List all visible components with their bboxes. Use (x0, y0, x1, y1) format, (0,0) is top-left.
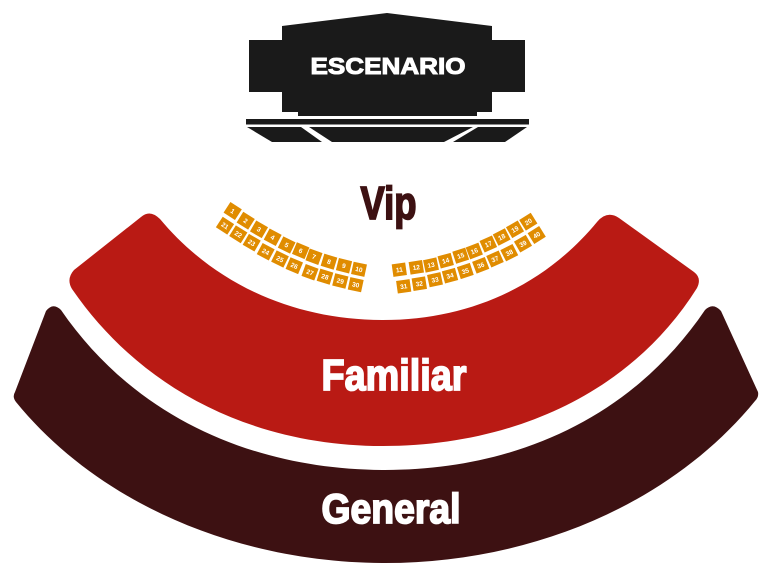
vip seats: right block: 40 (532, 231, 542, 241)
stage label: ESCENARIO (310, 53, 466, 79)
vip seats: left block: 23 (246, 239, 257, 248)
vip seats: left block: 2 (242, 217, 249, 226)
vip seats: left block: 26 (289, 262, 299, 271)
vip seats: right block: 34 (446, 272, 455, 281)
vip seats: right block: 33 (431, 276, 440, 285)
vip seats: left block: 7 (311, 254, 317, 261)
vip seats: left block: 29 (336, 278, 345, 286)
vip seats: left block (216, 202, 367, 292)
vip seats: left block: 30 (351, 281, 360, 290)
vip seats: left block: 1 (229, 208, 236, 216)
vip seats: left block: 9 (341, 263, 347, 270)
vip seats: right block: 39 (519, 239, 529, 249)
vip seats: right block: 15 (456, 252, 466, 261)
vip seats: left block: 27 (305, 269, 315, 278)
vip seats: left block: 25 (275, 255, 285, 265)
vip seats: left block: 22 (233, 230, 243, 240)
vip seats: left block: 4 (269, 234, 276, 242)
vip seats: right block: 18 (497, 233, 507, 242)
vip seats: left block: 21 (220, 221, 230, 231)
vip seats: right block: 17 (484, 240, 494, 249)
familiar label: Familiar (322, 351, 466, 400)
vip seats: left block: 24 (260, 248, 270, 257)
vip label: Vip (360, 177, 416, 229)
vip seats: left block: 6 (297, 248, 304, 256)
vip seats: right block: 14 (442, 257, 451, 266)
vip seats: left block: 28 (320, 273, 330, 282)
vip seats: right block: 16 (470, 247, 480, 256)
vip seats: right block: 36 (476, 261, 486, 271)
vip seats: right block: 38 (505, 248, 515, 258)
vip seats: left block: 5 (283, 242, 290, 250)
vip seats: right block: 12 (412, 264, 421, 272)
vip seats: right block: 19 (511, 225, 521, 235)
vip seats: left block: 3 (255, 226, 262, 234)
vip seats: left block: 8 (326, 259, 332, 266)
vip seats: right block: 35 (461, 267, 470, 276)
stage (246, 13, 529, 142)
vip seats: right block: 20 (524, 217, 534, 227)
vip seats: left block: 10 (355, 266, 363, 274)
vip seats: right block (392, 213, 546, 293)
vip seats: right block: 37 (491, 255, 500, 264)
vip seats: right block: 32 (415, 280, 424, 289)
vip seats: right block: 11 (396, 266, 404, 274)
general label: General (322, 485, 460, 532)
vip seats: right block: 31 (400, 283, 408, 291)
vip seats: right block: 13 (427, 262, 436, 270)
